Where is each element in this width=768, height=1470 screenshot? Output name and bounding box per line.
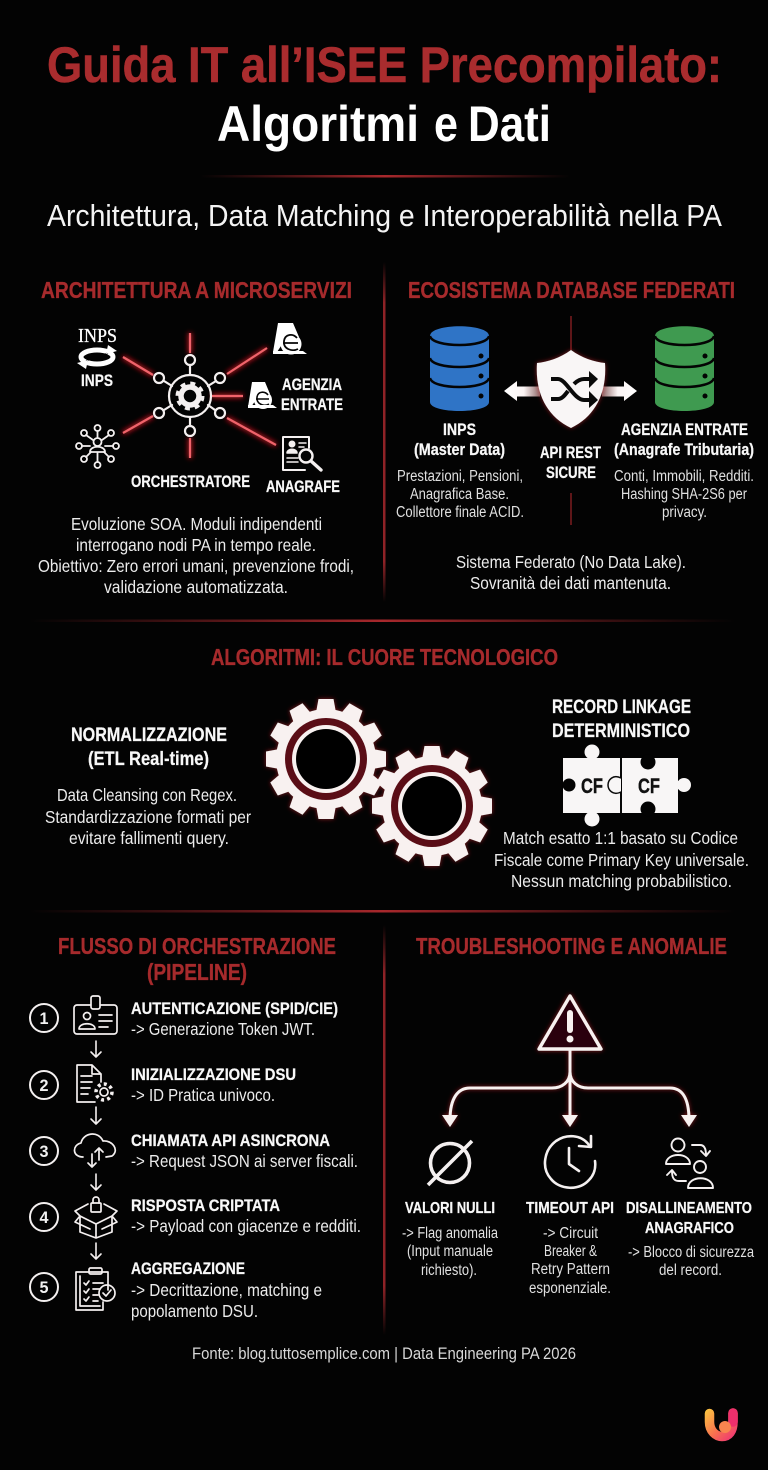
block: record linkage: Match esatto 1:1 basato su Codice (503, 828, 738, 848)
icon: puzzle CF (562, 744, 691, 826)
icon: API shield (537, 350, 605, 428)
block: record linkage: DETERMINISTICO (552, 721, 690, 742)
block: valori nulli: richiesto). (421, 1262, 477, 1279)
icon: null value (428, 1141, 472, 1185)
icon: anagrafe search (283, 437, 321, 470)
label: orchestratore: ORCHESTRATORE (131, 473, 250, 491)
text: federated system note: Sistema Federato (No Data Lake). (456, 552, 686, 572)
text: federated system note: Sovranità dei dati mantenuta. (470, 573, 671, 593)
block: normalizzazione: evitare fallimenti query. (69, 828, 229, 848)
title: e (434, 96, 458, 152)
block: valori nulli: (Input manuale (407, 1243, 493, 1260)
step 3: -> Request JSON ai server fiscali. (131, 1151, 358, 1171)
text: INPS details (396, 468, 524, 521)
icon: puzzle CF: CF (638, 775, 660, 798)
footer source: Fonte: blog.tuttosemplice.com | Data Engineering PA 2026 (192, 1345, 576, 1363)
arrow: 3 to 4 (91, 1174, 101, 1190)
step 2 (30, 1065, 296, 1105)
panel: architettura a microservizi (38, 277, 354, 597)
icon: green database (655, 326, 714, 411)
subtitle: Architettura, Data Matching e Interoperabilità nella PA (47, 198, 722, 233)
text: architettura description: validazione automatizzata. (104, 577, 288, 597)
step 2: INIZIALIZZAZIONE DSU (131, 1065, 296, 1084)
block: record linkage: RECORD LINKAGE (552, 697, 691, 718)
label: INPS: INPS (81, 372, 113, 390)
block: valori nulli: VALORI NULLI (405, 1200, 495, 1217)
text: agenzia details (614, 468, 754, 521)
step 3: 3 (40, 1142, 48, 1161)
step 5: 5 (40, 1278, 48, 1297)
block: timeout API: Breaker & (544, 1243, 598, 1260)
block: normalizzazione (45, 725, 251, 848)
block: record linkage: Nessun matching probabilistico. (511, 871, 732, 891)
label: INPS master data: (Master Data) (414, 440, 505, 459)
step 5: popolamento DSU. (131, 1301, 258, 1321)
step 1: AUTENTICAZIONE (SPID/CIE) (131, 999, 338, 1018)
block: timeout API (526, 1200, 614, 1297)
step 3: CHIAMATA API ASINCRONA (131, 1131, 330, 1150)
block: disallineamento anagrafico: ANAGRAFICO (645, 1220, 734, 1237)
heading: flusso: (PIPELINE) (147, 959, 247, 985)
text: architettura description: interrogano nodi PA in tempo reale. (76, 535, 316, 555)
icon: blue database (430, 326, 489, 411)
panel: troubleshooting (402, 933, 754, 1297)
arrow: to INPS (504, 381, 540, 401)
icon: orchestrator hub (154, 355, 225, 436)
icon: INPS logo (77, 325, 117, 369)
text: INPS details: Collettore finale ACID. (396, 504, 524, 521)
label: INPS master data (414, 420, 505, 459)
panel: algoritmi (45, 644, 749, 891)
block: record linkage (494, 697, 749, 891)
step 1: -> Generazione Token JWT. (131, 1019, 315, 1039)
label: agenzia entrate (281, 376, 343, 414)
icon: warning triangle with branching arrows (442, 996, 697, 1127)
arrow: 2 to 3 (91, 1107, 101, 1124)
label: API REST sicure: API REST (540, 443, 601, 462)
block: timeout API: TIMEOUT API (526, 1200, 614, 1217)
step 1 (30, 996, 338, 1039)
icon: logo (710, 1413, 733, 1436)
heading: algoritmi: ALGORITMI: IL CUORE TECNOLOGICO (211, 644, 558, 670)
step 5 (30, 1259, 322, 1321)
icon: data mismatch users (666, 1138, 713, 1188)
block: timeout API: -> Circuit (543, 1225, 599, 1242)
icon: agenzia top (273, 323, 307, 354)
label: agenzia entrate: ENTRATE (281, 396, 343, 414)
icon: gears (266, 699, 492, 866)
step 2: 2 (40, 1076, 48, 1095)
panel: flusso di orchestrazione (30, 933, 361, 1321)
icon: INPS logo: INPS (78, 325, 117, 347)
step 5: -> Decrittazione, matching e (131, 1280, 322, 1300)
block: normalizzazione: (ETL Real-time) (88, 749, 209, 770)
block: normalizzazione: NORMALIZZAZIONE (71, 725, 227, 746)
label: agenzia entrate anagrafe tributaria (614, 420, 754, 459)
icon: puzzle CF: CF (581, 775, 603, 798)
title: Dati (468, 96, 551, 152)
arrow: to agenzia entrate (602, 381, 637, 401)
step 2: -> ID Pratica univoco. (131, 1085, 275, 1105)
text: architettura description: Obiettivo: Zero errori umani, prevenzione frodi, (38, 556, 354, 576)
title (47, 37, 722, 152)
label: INPS master data: INPS (443, 420, 476, 439)
block: valori nulli (402, 1200, 498, 1279)
step 3 (30, 1131, 358, 1171)
block: disallineamento anagrafico (626, 1200, 754, 1279)
step 5: AGGREGAZIONE (131, 1259, 245, 1278)
text: INPS details: Anagrafica Base. (410, 486, 509, 503)
step 4: RISPOSTA CRIPTATA (131, 1196, 280, 1215)
step 1: 1 (40, 1009, 48, 1028)
text: federated system note (456, 552, 686, 593)
heading: flusso: FLUSSO DI ORCHESTRAZIONE (58, 933, 336, 959)
block: valori nulli: -> Flag anomalia (402, 1225, 498, 1242)
label: anagrafe: ANAGRAFE (266, 478, 340, 496)
icon: timeout clock (545, 1136, 595, 1188)
block: normalizzazione: Data Cleansing con Regex. (57, 785, 237, 805)
title: Algoritmi (217, 96, 419, 152)
icon: network node (76, 425, 119, 468)
icon: agenzia entrate (248, 382, 277, 409)
step 4: -> Payload con giacenze e redditi. (131, 1216, 361, 1236)
block: disallineamento anagrafico: del record. (659, 1262, 722, 1279)
heading: architettura: ARCHITETTURA A MICROSERVIZI (41, 277, 352, 303)
block: timeout API: esponenziale. (529, 1280, 611, 1297)
label: API REST sicure (540, 443, 601, 482)
step 4 (30, 1196, 361, 1238)
text: INPS details: Prestazioni, Pensioni, (397, 468, 523, 485)
text: architettura description: Evoluzione SOA. Moduli indipendenti (71, 514, 322, 534)
label: agenzia entrate: AGENZIA (282, 376, 342, 394)
heading: flusso (58, 933, 336, 985)
text: architettura description (38, 514, 354, 597)
arrow: 1 to 2 (91, 1041, 101, 1057)
block: normalizzazione: Standardizzazione formati per (45, 807, 251, 827)
block: timeout API: Retry Pattern (531, 1261, 610, 1278)
step 4: 4 (40, 1208, 49, 1227)
text: agenzia details: privacy. (662, 504, 707, 521)
panel: ecosistema database federati (396, 277, 754, 593)
label: API REST sicure: SICURE (546, 463, 596, 482)
arrow: 4 to 5 (91, 1243, 101, 1259)
hub connector lines (123, 333, 276, 458)
